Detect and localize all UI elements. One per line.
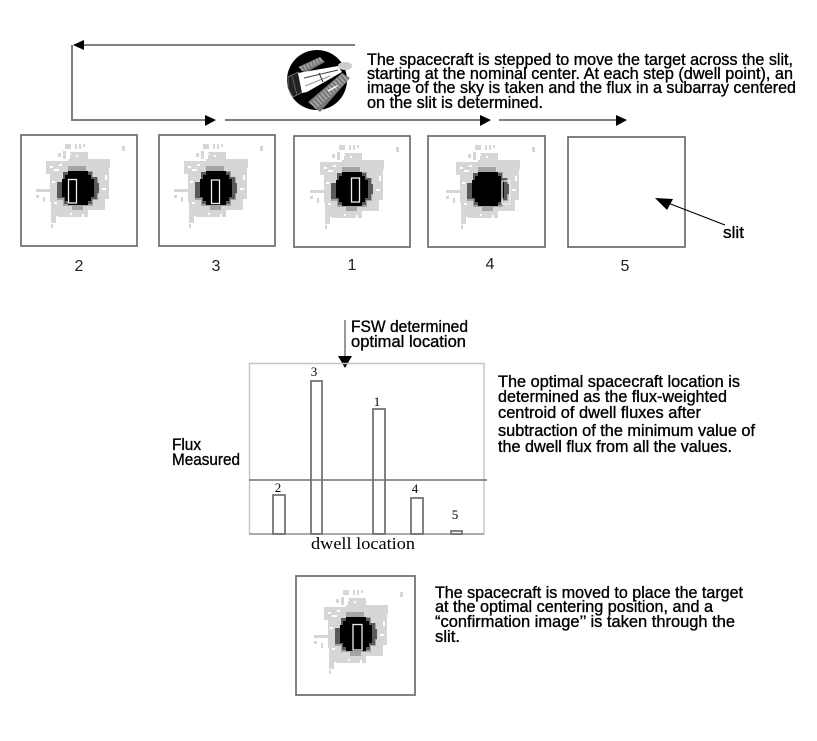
text: stepping description: image of the sky is taken and the flux in a subarray centered xyxy=(367,79,796,97)
text: stepping description: on the slit is determined. xyxy=(367,94,543,112)
text: stepping description: The spacecraft is stepped to move the target across the slit, xyxy=(367,51,793,69)
text: optimal location description: The optimal spacecraft location is xyxy=(498,373,740,391)
panel: dwell image 3 xyxy=(159,135,275,246)
panel: dwell image 4 xyxy=(428,136,545,247)
text: optimal location description: the dwell flux from all the values. xyxy=(498,438,732,456)
bar chart: flux per dwell xyxy=(249,364,487,534)
bar chart: flux per dwell: 4 xyxy=(412,481,419,496)
axis label: flux measured: Flux xyxy=(172,436,202,454)
panel: dwell image 1 xyxy=(294,136,410,247)
text: confirmation description: “confirmation image’’ is taken through the xyxy=(435,613,735,631)
text: confirmation description: slit. xyxy=(435,628,460,646)
text: confirmation description xyxy=(435,584,743,646)
axis label: dwell location: dwell location xyxy=(311,534,416,553)
label: FSW determined optimal location: optimal location xyxy=(351,333,466,351)
arrow: slit pointer xyxy=(655,198,725,225)
icon: spacecraft xyxy=(287,50,352,112)
text: optimal location description: centroid of dwell fluxes after xyxy=(498,404,701,422)
frame numbers: 4 xyxy=(486,256,495,273)
label: slit: slit xyxy=(723,224,744,242)
text: optimal location description: subtraction of the minimum value of xyxy=(498,422,755,440)
panel: confirmation image xyxy=(296,576,415,695)
text: optimal location description: determined as the flux-weighted xyxy=(498,388,727,406)
panel: dwell image 2 xyxy=(21,135,137,246)
arrow: optimal location xyxy=(338,320,352,368)
stepping path arrows xyxy=(72,40,627,126)
label: FSW determined optimal location: FSW determined xyxy=(351,318,468,336)
text: stepping description: starting at the nominal center. At each step (dwell point), an xyxy=(367,65,793,83)
frame numbers: 3 xyxy=(212,258,221,275)
frame numbers: 2 xyxy=(75,258,84,275)
text: optimal location description xyxy=(498,373,755,456)
bar chart: flux per dwell: 1 xyxy=(374,394,380,409)
bar chart: flux per dwell: 5 xyxy=(452,507,458,522)
frame numbers: 5 xyxy=(621,258,630,275)
text: confirmation description: The spacecraft is moved to place the target xyxy=(435,584,743,602)
panel: dwell image 5 xyxy=(568,137,685,247)
frame numbers: 1 xyxy=(348,257,357,274)
axis label: flux measured: Measured xyxy=(172,451,240,469)
text: stepping description xyxy=(367,51,796,112)
label: FSW determined optimal location xyxy=(351,318,468,351)
bar chart: flux per dwell: 3 xyxy=(311,364,317,379)
frame numbers xyxy=(75,256,630,275)
bar chart: flux per dwell: 2 xyxy=(275,480,281,495)
text: confirmation description: at the optimal centering position, and a xyxy=(435,598,714,616)
axis label: flux measured xyxy=(172,436,240,469)
